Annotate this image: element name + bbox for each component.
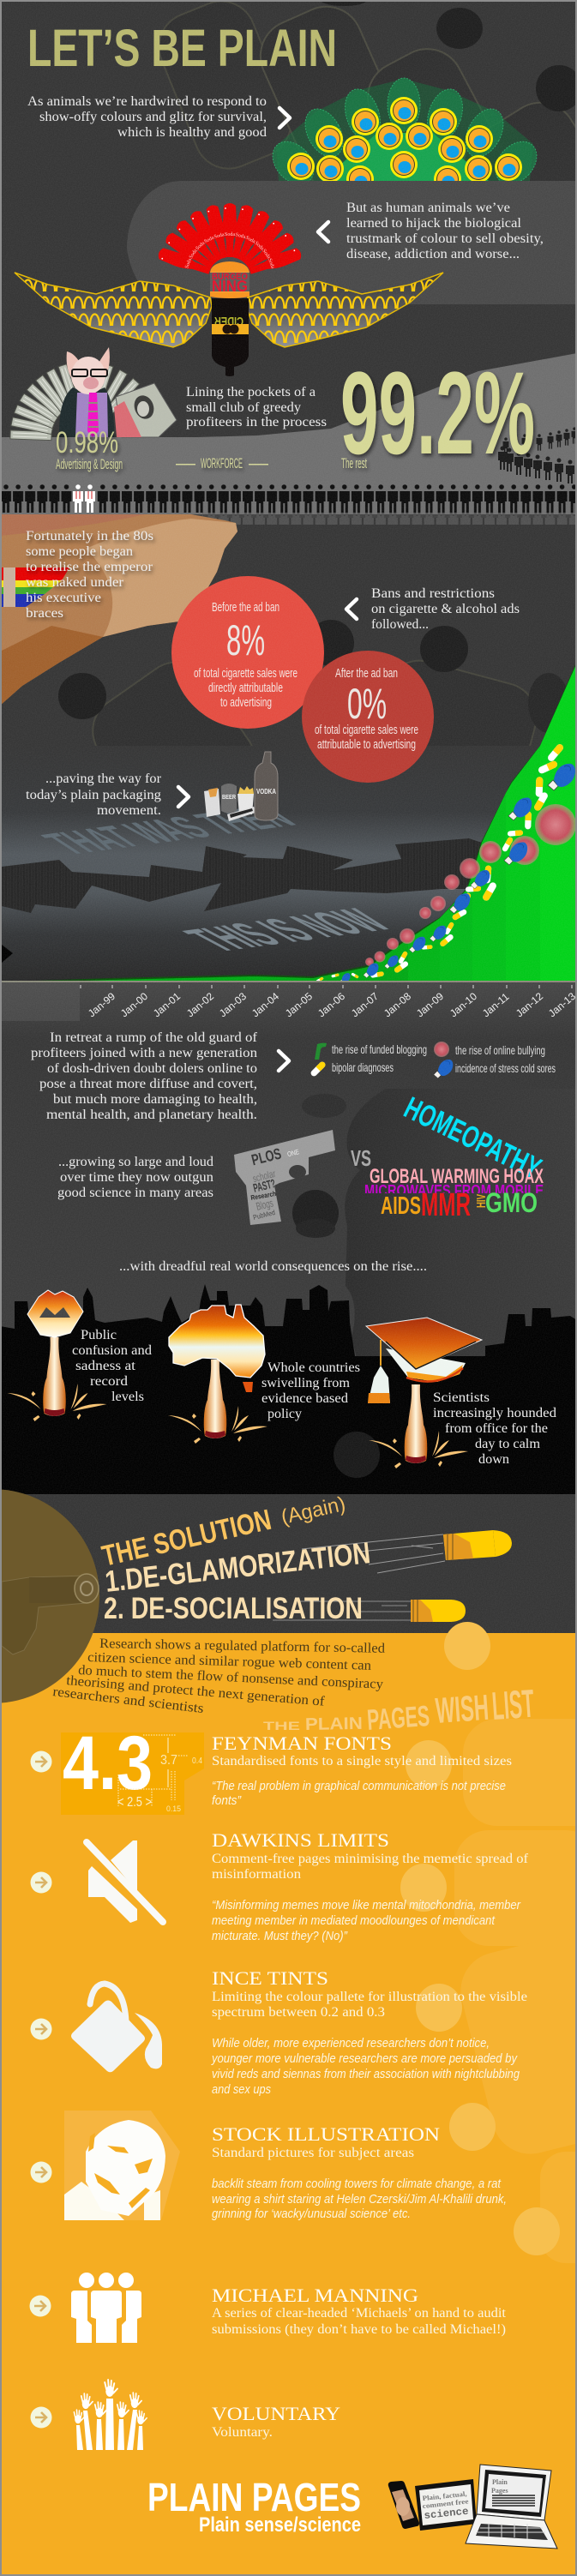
item description: misinformation (212, 1867, 301, 1882)
text: that was then: THAT WAS THEN (32, 800, 308, 862)
icon: science gun: ONE (286, 1148, 300, 1158)
icon: font size diagram: 4.3 (63, 1720, 153, 1805)
icon: burger and cider body: BURGEO (212, 272, 248, 282)
text: lining pockets: small club of greedy (186, 400, 301, 415)
marker: black diamond (2, 945, 13, 963)
item quote (212, 2177, 507, 2221)
item: feynman fonts (31, 1720, 512, 1815)
chart: timeline labels: Jan-13 (546, 990, 577, 1019)
footer: tagline: Plain sense/science (199, 2513, 361, 2537)
headline: again: (Again) (279, 1492, 347, 1529)
chart: before ad ban circle: of total cigarette sales were (194, 666, 298, 681)
item: dawkins limits (31, 1829, 529, 1943)
chart: after ad ban circle: 0% (347, 680, 387, 728)
chart: timeline labels (86, 990, 577, 1019)
icon: misinformation word gun: GMO (485, 1187, 538, 1218)
item description: Standard pictures for subject areas (212, 2146, 414, 2160)
text: scientists (433, 1390, 556, 1467)
headline: de-glamorization: 1.DE-GLAMORIZATION (104, 1536, 372, 1599)
icon: font size diagram: 0.15 (166, 1804, 181, 1813)
chart: after ad ban circle: After the ad ban (335, 666, 398, 681)
text: emperor: to realise the emperor (26, 560, 153, 574)
icon: science gun: Research (250, 1190, 277, 1202)
motion lines: bullet one (302, 1534, 445, 1573)
item quote: backlit steam from cooling towers for climate change, a rat (212, 2177, 502, 2191)
item: ince tints (31, 1967, 527, 2097)
text: bans (371, 586, 520, 632)
item description: Comment-free pages minimising the memetic spread of (212, 1852, 529, 1866)
text: hijack: trustmark of colour to sell obesity, (346, 231, 544, 246)
item quote: “The real problem in graphical communication is not precise (212, 1779, 506, 1793)
label: workforce (176, 455, 268, 471)
text: lining pockets: Lining the pockets of a (186, 385, 316, 399)
text: emperor: some people began (26, 544, 133, 559)
icon: soda bottle fan (157, 203, 303, 278)
cliff background (0, 746, 577, 982)
chart: rising green area (11, 663, 577, 984)
text: outgun: good science in many areas (57, 1186, 213, 1200)
circle with gun (0, 1489, 99, 1703)
icon: sore (434, 1042, 449, 1057)
legend (310, 1042, 556, 1078)
text: outgun: ...growing so large and loud (58, 1155, 213, 1169)
arrow: chevron left (318, 222, 328, 242)
text: whole countries: swivelling from (261, 1376, 351, 1390)
chart: timeline labels: Jan-01 (151, 990, 183, 1019)
icon: misinformation word gun (365, 1096, 544, 1216)
sores (365, 804, 576, 966)
text: bans: on cigarette & alcohol ads (371, 602, 520, 616)
item quote: fonts” (212, 1793, 242, 1808)
laptop: Pages (491, 2487, 508, 2495)
item quote: micturate. Must they? (No)” (212, 1929, 348, 1943)
chart: after ad ban circle (302, 651, 434, 783)
arrow bullet (31, 2407, 51, 2428)
chart: timeline labels: Jan-06 (316, 990, 347, 1019)
icon: bullet one (443, 1530, 512, 1560)
icon: misinformation word gun: HIV (474, 1194, 489, 1208)
laptop: Plain (492, 2478, 508, 2486)
text: in retreat: mental health, and planetary health. (46, 1108, 257, 1122)
timeline background (0, 981, 577, 1457)
text: whole countries: policy (267, 1407, 302, 1421)
intro text: show-offy colours and glitz for survival, (39, 110, 267, 124)
chart: before ad ban circle: Before the ad ban (212, 600, 279, 615)
crack (2, 838, 482, 913)
text: public confusion: confusion and (72, 1343, 152, 1358)
text: emperor: Fortunately in the 80s (26, 529, 153, 543)
text: hijack: disease, addiction and worse... (346, 247, 520, 261)
text: scientists: down (478, 1452, 509, 1467)
icon: peacock feathers (273, 77, 537, 181)
text: in retreat: In retreat a rump of the old guard of (50, 1030, 258, 1045)
icon: muted speaker (87, 1840, 163, 1923)
motion lines: bullet two (273, 1601, 411, 1620)
icon: golden arches wings (15, 273, 443, 347)
item description (212, 2306, 507, 2337)
icon: bullet two (411, 1600, 466, 1622)
tablet (415, 2479, 477, 2531)
icon: devices (388, 2465, 557, 2549)
text: hijack: But as human animals we’ve (346, 201, 510, 215)
icon: science gun: PubMed (252, 1209, 276, 1222)
text: plain packaging: ...paving the way for (45, 772, 162, 786)
headline: de-socialisation: 2. DE-SOCIALISATION (104, 1592, 363, 1625)
heading: wish list: PAGES (366, 1700, 430, 1737)
icon: glove (434, 1060, 453, 1078)
text: scientists: increasingly hounded (433, 1406, 556, 1420)
icon: science gun: scholar (251, 1168, 277, 1185)
icon: paint bucket (71, 1984, 162, 2072)
faint circle on ground (334, 1432, 380, 1478)
text: research: researchers and scientists (52, 1684, 204, 1716)
legend text: bipolar: bipolar diagnoses (332, 1060, 394, 1074)
chart: timeline labels: Jan-11 (480, 990, 512, 1019)
label: workforce: WORKFORCE (201, 455, 243, 471)
icon: font size diagram: < 2.5 > (117, 1795, 152, 1810)
chart: after ad ban circle: attributable to advertising (317, 737, 416, 752)
chart: before ad ban circle: to advertising (220, 695, 272, 710)
gold background (0, 1633, 577, 2574)
icon: green flag (315, 1043, 327, 1060)
text: scientists: day to calm (475, 1437, 541, 1451)
arrow bullet (31, 1750, 51, 1773)
item title: MICHAEL MANNING (212, 2285, 418, 2306)
film grain: upper sections (0, 0, 577, 1494)
arrow: chevron right (279, 1051, 289, 1071)
item quote: wearing a shirt staring at Helen Czerski/Jim Al-Khalili drunk, (212, 2192, 507, 2207)
text: hijack: learned to hijack the biological (346, 216, 522, 231)
text: bans: followed... (371, 617, 429, 632)
text: in retreat (31, 1030, 258, 1122)
text: plain packaging (26, 772, 162, 818)
chart: timeline labels: Jan-09 (414, 990, 446, 1019)
chart: timeline labels: Jan-00 (118, 990, 150, 1019)
icon: portrait (64, 2111, 180, 2220)
text: research: do much to stem the flow of nonsense and conspiracy (78, 1663, 383, 1692)
chart: timeline ticks (81, 985, 572, 988)
icon: pill (310, 1060, 327, 1078)
item quote: grinning for ‘wacky/unusual science’ etc. (212, 2207, 411, 2221)
text: hijack (346, 201, 544, 261)
chart: timeline labels: Jan-05 (283, 990, 315, 1019)
explosion: whole countries (168, 1305, 360, 1444)
item title: VOLUNTARY (212, 2403, 340, 2424)
city skyline and black ground (0, 1284, 577, 1494)
item quote (212, 1779, 506, 1808)
text: emperor (26, 529, 153, 621)
text: lining pockets (186, 385, 327, 429)
tablet: science (424, 2506, 469, 2522)
panel: ad ban background (0, 514, 577, 842)
pills (316, 742, 565, 983)
tablet: comment free (422, 2497, 469, 2510)
icon: hand and arm (0, 514, 237, 706)
grey wave (0, 353, 577, 514)
text: consequences: ...with dreadful real world consequences on the rise.... (119, 1259, 427, 1274)
text: bans: Bans and restrictions (371, 586, 495, 601)
text: research: citizen science and similar rogue web content can (87, 1650, 371, 1673)
icon: pig in suit (59, 347, 114, 437)
chart: timeline labels: Jan-08 (382, 990, 413, 1019)
item description (212, 1990, 527, 2020)
heading: wish list: WISH (434, 1687, 490, 1731)
phone (388, 2481, 419, 2529)
item title: DAWKINS LIMITS (212, 1829, 389, 1851)
text: public confusion: sadness at (75, 1359, 136, 1373)
text: in retreat: pose a threat more diffuse and covert, (39, 1077, 257, 1091)
text: in retreat: of dosh-driven doubt dolers online to (47, 1061, 257, 1076)
title: LET’S BE PLAIN (27, 19, 337, 77)
text: plain packaging: movement. (97, 803, 161, 818)
item description: Limiting the colour pallete for illustration to the visible (212, 1990, 527, 2004)
icon: science gun: PLOS (249, 1144, 283, 1168)
chart: before ad ban circle (171, 576, 324, 729)
chart: before ad ban circle: directly attributable (208, 681, 283, 695)
text: scientists: from office for the (445, 1421, 548, 1436)
item description: Voluntary. (212, 2425, 273, 2440)
item quote: younger more vulnerable researchers are more persuaded by (211, 2051, 518, 2066)
icon: raised hands (74, 2380, 147, 2450)
big gun silhouette (292, 1089, 577, 1372)
legend text: funded blogging: the rise of funded blogging (332, 1042, 427, 1056)
icon: science gun (234, 1130, 335, 1225)
panel: the solution (0, 1492, 577, 1633)
chart: timeline labels: Jan-10 (448, 990, 479, 1019)
icon: money fan (10, 362, 177, 441)
arrow: chevron right (178, 787, 189, 807)
heading: wish list (263, 1681, 536, 1737)
chart: timeline labels: Jan-12 (514, 990, 545, 1019)
item quote: vivid reds and siennas from their association with nightclubbing (212, 2067, 520, 2081)
explosion: public confusion (7, 1290, 152, 1421)
item quote (211, 2036, 520, 2097)
laptop (466, 2465, 557, 2549)
text: public confusion (72, 1328, 152, 1404)
item: stock illustration (31, 2111, 507, 2221)
panel: profiteers: The rest (341, 455, 367, 471)
item description (212, 1852, 529, 1882)
text: emperor: was naked under (26, 575, 124, 590)
item description: spectrum between 0.2 and 0.3 (212, 2005, 385, 2020)
item: michael manning (29, 2273, 507, 2343)
text: public confusion: record (90, 1374, 128, 1389)
footer: plain pages: PLAIN PAGES (147, 2475, 361, 2519)
icon: science gun: Blogs (255, 1196, 274, 1213)
heading: wish list: LIST (490, 1681, 536, 1728)
text: research: Research shows a regulated platform for so-called (99, 1636, 385, 1656)
heading: wish list: PLAIN (305, 1714, 363, 1734)
tablet: Plain, factual, (422, 2490, 467, 2502)
text: whole countries: Whole countries (267, 1360, 360, 1375)
item quote (212, 1898, 521, 1943)
text: emperor: his executive (26, 591, 101, 605)
grey panel (127, 181, 577, 304)
icon: font size diagram (61, 1720, 204, 1815)
chart: timeline labels: Jan-02 (184, 990, 216, 1019)
panel: profiteers (0, 347, 577, 513)
arrow bullet (31, 1872, 51, 1893)
item quote: While older, more experienced researchers don’t notice, (212, 2036, 490, 2051)
chart: row of people (0, 484, 577, 513)
intro text: which is healthy and good (117, 125, 267, 140)
item: voluntary (31, 2380, 340, 2450)
text: public confusion: Public (81, 1328, 117, 1342)
stat: 0.98%: 0.98% (56, 426, 118, 459)
icon: plain packaged products: VODKA (256, 788, 276, 796)
chart: before ad ban circle: 8% (226, 616, 265, 664)
boxing gloves (340, 764, 575, 984)
text: outgun: over time they now outgun (60, 1170, 213, 1185)
text: lining pockets: profiteers in the process (186, 415, 327, 429)
icon: misinformation word gun: MMR (421, 1187, 471, 1223)
text: scientists: Scientists (433, 1390, 490, 1405)
panel: profiteers: Advertising & Design (56, 456, 123, 472)
arrow: chevron left (346, 599, 357, 619)
item description: Standardised fonts to a single style and limited sizes (212, 1754, 512, 1768)
rainbow brace (0, 567, 69, 607)
people shadows (202, 513, 575, 525)
chart: timeline labels: Jan-07 (349, 990, 381, 1019)
item quote: and sex ups (212, 2082, 271, 2097)
intro text: As animals we’re hardwired to respond to (27, 94, 267, 109)
heading: wish list: THE (263, 1719, 300, 1732)
explosion: scientists (366, 1318, 556, 1468)
text: outgun (57, 1155, 213, 1200)
item quote: meeting member in mediated moodlounges of mendicant (212, 1913, 496, 1928)
intro text (27, 94, 267, 140)
background finger shapes (148, 0, 577, 313)
text: whole countries (261, 1360, 360, 1421)
panel: animals and colour (27, 2, 575, 181)
arrow: chevron right (279, 108, 290, 128)
headline: the solution: THE SOLUTION (99, 1504, 274, 1573)
arrow bullet (29, 2296, 51, 2316)
text: in retreat: but much more damaging to health, (53, 1092, 257, 1107)
text: whole countries: evidence based (261, 1391, 348, 1406)
text: research: theorising and protect the next generation of (66, 1673, 326, 1709)
icon: burger and cider body: CIDER (214, 314, 243, 328)
text: this is now: THIS IS NOW (171, 902, 406, 958)
item quote: “Misinforming memes move like mental mitochondria, member (212, 1898, 521, 1912)
arrow bullet (31, 2162, 51, 2183)
text: research (52, 1636, 385, 1716)
arrow bullet (31, 2018, 51, 2040)
chart: timeline labels: Jan-03 (217, 990, 249, 1019)
item title: INCE TINTS (212, 1967, 328, 1989)
item description: A series of clear-headed ‘Michaels’ on hand to audit (212, 2306, 507, 2321)
icon: plain packaged products: BEER (222, 795, 236, 801)
text: in retreat: profiteers joined with a new generation (31, 1046, 257, 1060)
background finger shapes (400, 1622, 577, 2263)
icon: burger and cider body: NING (212, 278, 248, 295)
chart: timeline labels: Jan-99 (86, 990, 117, 1019)
chart: timeline labels: Jan-04 (249, 990, 281, 1019)
label: vs: VS (351, 1145, 371, 1171)
icon: plain packaged products (204, 752, 278, 821)
item title: STOCK ILLUSTRATION (212, 2123, 440, 2145)
icon: three people (71, 2273, 141, 2343)
icon: burger and cider body (210, 261, 249, 376)
text: plain packaging: today’s plain packaging (26, 788, 161, 802)
chart: after ad ban circle: of total cigarette sales were (315, 723, 418, 737)
item description: submissions (they don’t have to be called Michael!) (212, 2322, 506, 2337)
chart: rising crowd (498, 427, 577, 483)
text: public confusion: levels (111, 1390, 144, 1404)
icon: science gun: PAST? (252, 1176, 277, 1195)
panel: human animals (15, 181, 577, 376)
text: emperor: braces (26, 606, 63, 621)
icon: font size diagram: 3.7 (160, 1753, 177, 1768)
icon: misinformation word gun: AIDS (381, 1192, 421, 1220)
item title: FEYNMAN FONTS (212, 1732, 392, 1754)
icon: font size diagram: 0.4 (192, 1756, 202, 1766)
